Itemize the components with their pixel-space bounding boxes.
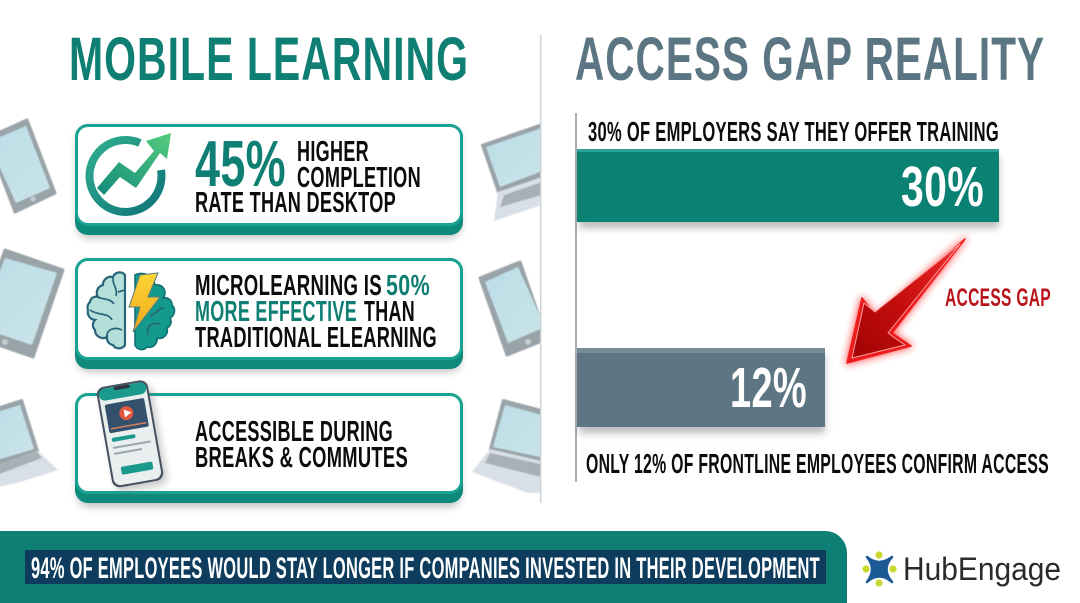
chart axis bbox=[575, 113, 577, 482]
divider bbox=[540, 35, 542, 503]
footer banner bbox=[0, 531, 847, 603]
text: higher completion: HIGHER bbox=[297, 136, 369, 168]
device: laptop bottom right bbox=[472, 400, 545, 493]
background device pattern bbox=[0, 120, 547, 493]
text: accessibility statement: BREAKS & COMMUTES bbox=[195, 442, 408, 474]
text: microlearning statement: MICROLEARNING IS bbox=[195, 270, 382, 302]
text: microlearning statement: 50% bbox=[386, 270, 430, 302]
icon: logo mark bbox=[862, 551, 897, 587]
icon: growth arrow bbox=[89, 133, 171, 212]
device: tablet mid left bbox=[0, 250, 63, 357]
text: higher completion: COMPLETION bbox=[297, 162, 421, 194]
device: phone top left bbox=[0, 120, 55, 212]
title: mobile learning: MOBILE LEARNING bbox=[69, 25, 469, 93]
panel: accessibility card bbox=[75, 379, 463, 507]
icon: smartphone with video bbox=[96, 379, 168, 493]
stat: 45%: 45% bbox=[195, 127, 286, 200]
text: microlearning statement: TRADITIONAL ELEARNING bbox=[195, 322, 437, 354]
text: accessibility statement bbox=[195, 416, 408, 474]
device: laptop bottom left bbox=[0, 400, 58, 488]
text: accessibility statement: ACCESSIBLE DURING bbox=[195, 416, 393, 448]
value: 30%: 30% bbox=[901, 155, 984, 219]
value: 12%: 12% bbox=[730, 356, 807, 420]
logo wordmark: HubEngage bbox=[903, 551, 1061, 587]
text: higher completion bbox=[195, 136, 421, 219]
text: microlearning statement bbox=[195, 270, 437, 354]
text: higher completion: RATE THAN DESKTOP bbox=[195, 187, 396, 219]
bar: frontline 12% bbox=[577, 348, 825, 433]
panel: completion rate card bbox=[75, 124, 463, 238]
arrow: access gap bbox=[847, 239, 965, 363]
logo: HubEngage bbox=[862, 551, 1061, 587]
bar: employers 30% bbox=[577, 149, 999, 228]
icon: brain and lightning bbox=[87, 272, 174, 350]
text: microlearning statement: MORE EFFECTIVE bbox=[195, 296, 357, 328]
text: microlearning statement: THAN bbox=[364, 296, 415, 328]
device: laptop top right bbox=[482, 123, 545, 221]
device: phone mid right bbox=[480, 262, 547, 355]
panel: microlearning card bbox=[75, 258, 463, 372]
